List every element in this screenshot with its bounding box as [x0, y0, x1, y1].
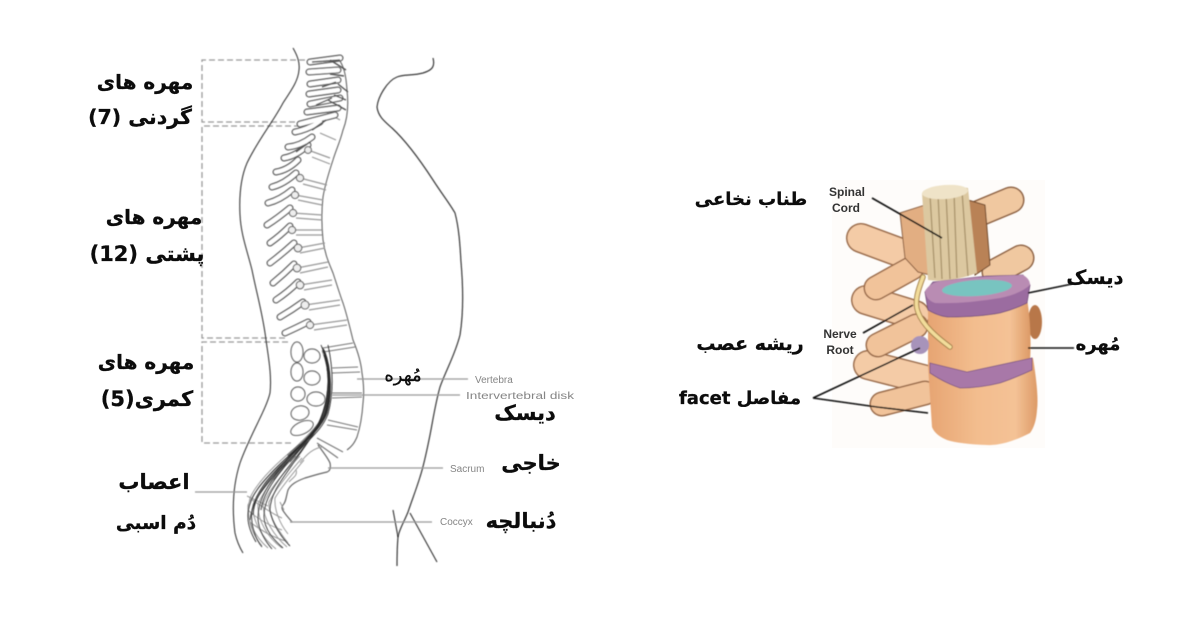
- label: Intervertebral disk: Intervertebral disk: [466, 391, 575, 402]
- coccyx detail: [280, 447, 322, 510]
- cervical shading: [296, 60, 348, 152]
- illustration background: [832, 180, 1045, 448]
- label: cauda equina: دُم اسبی: [116, 513, 196, 534]
- disc lines: [292, 112, 347, 330]
- label: Coccyx: Coccyx: [440, 517, 473, 528]
- label: Spinal Cord: [829, 185, 865, 215]
- label: Sacrum: Sacrum: [450, 464, 484, 475]
- body outline: back of torso: [377, 58, 463, 566]
- cauda equina nerve bundle: [247, 345, 332, 549]
- leader lines: [813, 198, 1074, 413]
- right bump of vertebra: [1028, 305, 1042, 339]
- panel: lumbar vertebrae illustration: [679, 180, 1124, 448]
- label: spinal cord (Persian): طناب نخاعی: [695, 189, 807, 210]
- sacrum outline: [282, 445, 330, 522]
- cervical and thoracic spinous processes: [267, 58, 340, 333]
- label: Nerve Root: Root: [826, 343, 854, 357]
- lower disc: [930, 358, 1032, 388]
- label: cervical vertebrae: مهره های: [97, 70, 193, 94]
- transverse processes: [861, 200, 1021, 404]
- lumbar disc lines: [317, 343, 362, 458]
- leader lines for side view: [195, 379, 468, 522]
- facet joint: [911, 336, 929, 354]
- label: cauda equina: [116, 470, 196, 534]
- top disc: [925, 275, 1030, 317]
- lumbar processes: [289, 342, 325, 439]
- label: vertebra (Persian): مُهره: [1076, 334, 1120, 355]
- facet joints: [288, 147, 314, 329]
- label: thoracic vertebrae: مهره های: [106, 205, 202, 229]
- label: sacrum (Persian): خاجی: [501, 451, 561, 475]
- upper vertebral body: [928, 298, 1031, 376]
- label: Nerve Root: [823, 327, 857, 357]
- label: cervical vertebrae: [88, 70, 193, 129]
- label: disc (Persian): دیسک: [1066, 266, 1124, 289]
- label: Vertebra: Vertebra: [475, 375, 513, 386]
- anterior edge of vertebral column: [322, 58, 364, 450]
- label: Nerve Root: Nerve: [823, 327, 857, 341]
- label: facet joints: مفاصل facet: [679, 388, 801, 409]
- lower vertebral body: [928, 358, 1038, 445]
- label: cauda equina: اعصاب: [118, 470, 190, 494]
- leg outlines: [393, 510, 437, 562]
- label: lumbar vertebrae: کمری(5): [101, 387, 194, 411]
- vertebral arch behind the cord: [900, 205, 930, 275]
- label: thoracic vertebrae: [90, 205, 204, 266]
- label: nerve root (Persian): ریشه عصب: [696, 333, 804, 355]
- nerve root: [916, 277, 950, 347]
- spine drawing: [267, 58, 364, 522]
- panel: side view of the spine: [88, 48, 575, 566]
- dashed brackets for spine regions: [202, 60, 305, 443]
- spinal cord: [922, 187, 977, 281]
- label: Spinal Cord: Spinal: [829, 185, 865, 199]
- body outline: front of torso: [233, 48, 299, 553]
- label: lumbar vertebrae: [98, 350, 194, 411]
- nucleus of disc: [942, 278, 1012, 298]
- label: coccyx (Persian): دُنبالچه: [486, 509, 557, 533]
- label: Spinal Cord: Cord: [832, 201, 860, 215]
- label: cervical vertebrae: گردنی (7): [88, 105, 192, 129]
- label: thoracic vertebrae: پشتی (12): [90, 242, 204, 266]
- label: lumbar vertebrae: مهره های: [98, 350, 194, 374]
- cord top face: [922, 183, 968, 201]
- label: disc (Persian): دیسک: [494, 401, 556, 425]
- label: vertebra (Persian): مُهره: [384, 365, 422, 386]
